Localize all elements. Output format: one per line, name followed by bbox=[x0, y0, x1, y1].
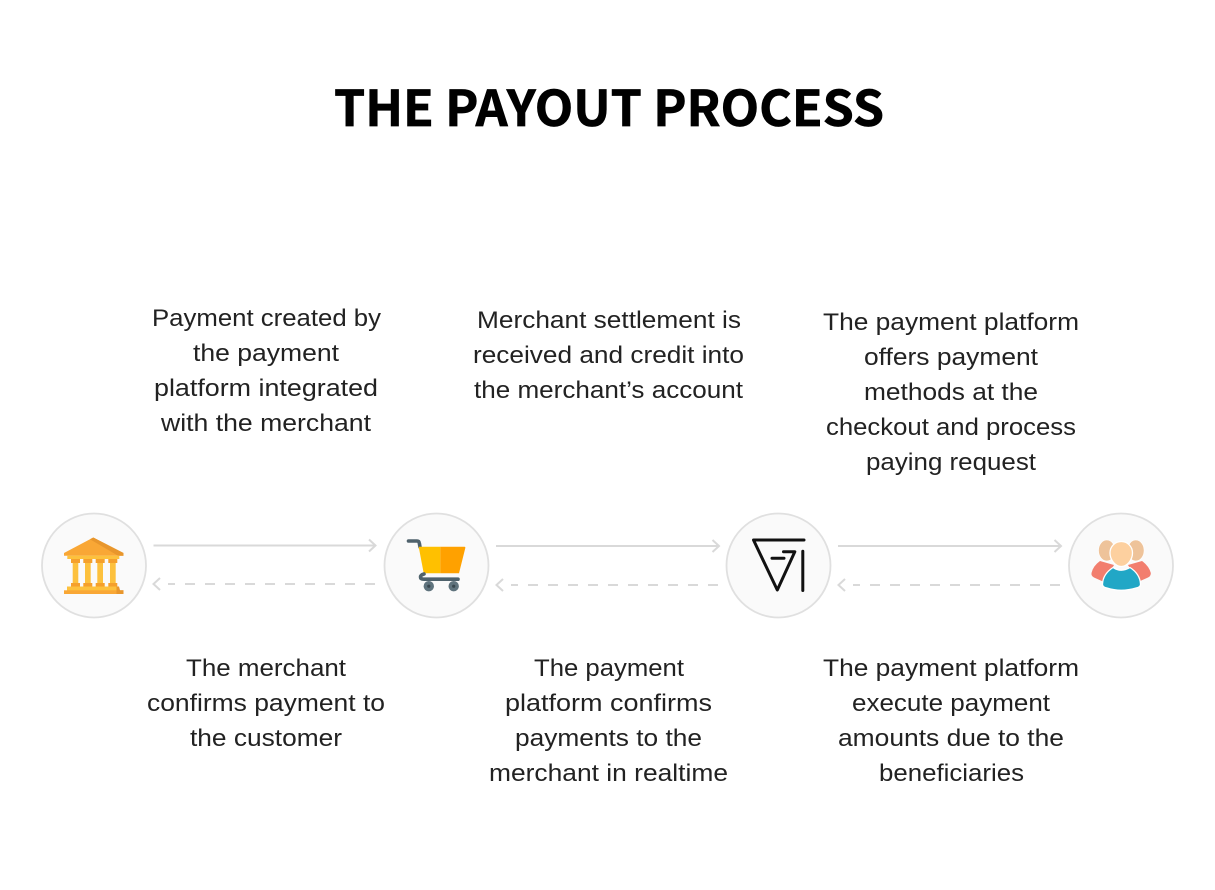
icon: shopping cart bbox=[384, 514, 488, 618]
text block: payment created bbox=[152, 305, 381, 437]
icon: payment platform logo bbox=[726, 514, 830, 618]
text block: platform confirms: merchant in realtime bbox=[489, 760, 728, 787]
text block: merchant confirms bbox=[147, 655, 385, 752]
text block: merchant settlement: the merchant’s account bbox=[474, 377, 743, 404]
text block: merchant settlement: received and credit into bbox=[473, 342, 744, 369]
text block: merchant settlement: Merchant settlement is bbox=[477, 307, 741, 334]
text block: payment methods: The payment platform bbox=[823, 309, 1079, 336]
text block: platform executes: execute payment bbox=[852, 690, 1050, 717]
text block: payment created: with the merchant bbox=[160, 410, 371, 437]
text block: merchant confirms: The merchant bbox=[186, 655, 346, 682]
text block: merchant settlement bbox=[473, 307, 744, 404]
icon: bank bbox=[42, 514, 146, 618]
text block: payment created: platform integrated bbox=[154, 375, 378, 402]
arrow: merchant to bank dashed bbox=[154, 578, 375, 590]
text block: platform confirms: platform confirms bbox=[505, 690, 712, 717]
text block: platform confirms: payments to the bbox=[515, 725, 702, 752]
arrow: merchant to platform bbox=[496, 540, 719, 552]
text block: payment methods: offers payment bbox=[864, 344, 1038, 371]
text block: payment created: Payment created by bbox=[152, 305, 381, 332]
text block: payment methods bbox=[823, 309, 1079, 476]
text block: platform executes: amounts due to the bbox=[838, 725, 1064, 752]
arrow: platform to beneficiaries bbox=[838, 540, 1061, 552]
arrow: beneficiaries to platform dashed bbox=[838, 579, 1060, 591]
icon: beneficiaries group bbox=[1069, 514, 1173, 618]
text block: merchant confirms: the customer bbox=[190, 725, 342, 752]
arrow: platform to merchant dashed bbox=[496, 579, 718, 591]
text block: platform executes: The payment platform bbox=[823, 655, 1079, 682]
text block: platform confirms: The payment bbox=[534, 655, 684, 682]
text block: payment methods: checkout and process bbox=[826, 414, 1076, 441]
text block: payment methods: methods at the bbox=[864, 379, 1038, 406]
text block: platform executes bbox=[823, 655, 1079, 787]
arrow: bank to merchant bbox=[154, 540, 376, 552]
text block: merchant confirms: confirms payment to bbox=[147, 690, 385, 717]
title: THE PAYOUT PROCESS bbox=[334, 70, 884, 141]
text block: platform confirms bbox=[489, 655, 728, 787]
text block: payment created: the payment bbox=[193, 340, 339, 367]
text block: platform executes: beneficiaries bbox=[879, 760, 1024, 787]
text block: payment methods: paying request bbox=[866, 449, 1036, 476]
